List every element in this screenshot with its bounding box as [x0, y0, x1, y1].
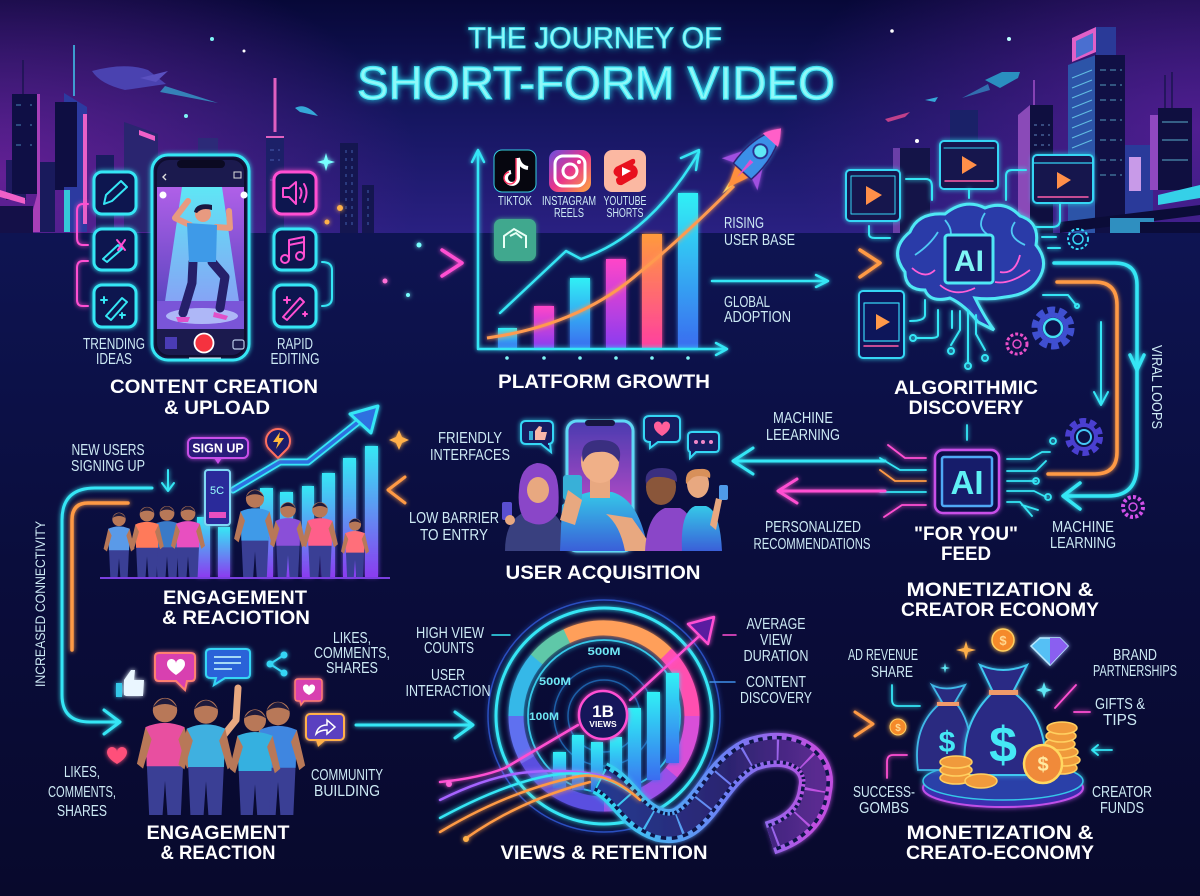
- label: average view duration: [744, 616, 808, 665]
- label: average view duration: DURATION: [744, 648, 808, 665]
- label: personalized recommendations: RECOMMENDATIONS: [754, 536, 870, 553]
- label: friendly interfaces: INTERFACES: [430, 447, 510, 464]
- reaction icons: [521, 416, 719, 458]
- heading: monetization and creator economy: MONETIZATION &: [906, 580, 1094, 601]
- heading: monetization and creator economy: [901, 580, 1099, 621]
- label: community building: BUILDING: [314, 783, 380, 800]
- label: gifts and tips: GIFTS &: [1095, 696, 1146, 713]
- section: algorithmic discovery: [846, 141, 1093, 419]
- flying car right: [962, 72, 1020, 98]
- label: ad revenue share: SHARE: [871, 664, 913, 681]
- icon: heart bubble: [155, 653, 195, 690]
- label: rising user base: RISING: [724, 215, 764, 232]
- label: for you feed: [914, 524, 1018, 565]
- label: high view counts: HIGH VIEW: [416, 625, 484, 642]
- flowing lines: [440, 771, 640, 842]
- section: monetization: [848, 629, 1177, 864]
- label: global adoption: GLOBAL: [724, 294, 770, 311]
- label: personalized recommendations: PERSONALIZED: [765, 519, 861, 536]
- icon: pencil: [94, 172, 136, 214]
- label: friendly interfaces: [430, 430, 510, 464]
- label: rapid editing: EDITING: [270, 351, 320, 368]
- label: creator funds: CREATOR: [1092, 784, 1152, 801]
- label: content discovery: DISCOVERY: [740, 690, 812, 707]
- icon: tiktok: [494, 150, 536, 192]
- label: new users signing up: [71, 442, 145, 475]
- label: creator funds: [1092, 784, 1152, 817]
- bracket: right: [322, 262, 332, 306]
- bag big: [965, 665, 1046, 775]
- heading: content creation: [110, 377, 318, 419]
- label: high view counts: COUNTS: [424, 640, 474, 657]
- viral loop arrow teal: [1054, 263, 1144, 509]
- label: rapid editing: [270, 336, 320, 368]
- platform labels: TIKTOK: [498, 194, 532, 208]
- heading: engagement and reaction: [146, 823, 290, 864]
- person: man with phone: [560, 440, 655, 551]
- bag big: $: [989, 717, 1017, 773]
- phone sign up: [205, 470, 230, 525]
- label: rising user base: [724, 215, 795, 249]
- chart axes: [472, 150, 727, 355]
- label: content discovery: [740, 674, 812, 707]
- person: blond man: [682, 469, 728, 551]
- heading: algorithmic discovery: DISCOVERY: [908, 398, 1024, 419]
- section: engagement and reaction: [48, 630, 473, 864]
- heading: engagement and reaction: ENGAGEMENT: [146, 823, 290, 844]
- label: user interaction: USER: [431, 667, 465, 684]
- label: community building: [311, 767, 383, 800]
- section: new users: [71, 406, 390, 629]
- icon: lightning: [266, 429, 290, 458]
- label: likes comments shares top: COMMENTS,: [314, 645, 390, 662]
- growth arrow: [440, 617, 714, 782]
- icon: forward bubble: [306, 714, 344, 747]
- gauge labels: [529, 646, 620, 723]
- circuit lines: [869, 170, 1079, 369]
- arrow: global adoption: [712, 275, 828, 287]
- arrow: views to monetization: [733, 712, 873, 736]
- flying car small left: [295, 106, 318, 116]
- sparkles: [940, 641, 1052, 698]
- title line 2: SHORT-FORM VIDEO: [357, 57, 835, 109]
- icon: music: [274, 229, 316, 270]
- title line 1: THE JOURNEY OF: [468, 22, 722, 55]
- label: community building: COMMUNITY: [311, 767, 383, 784]
- icon: rocket: [704, 112, 799, 210]
- coin top: [992, 629, 1014, 651]
- flying car left: [92, 66, 218, 103]
- label: likes comments shares left: SHARES: [57, 803, 107, 820]
- rocket trail: [487, 186, 734, 338]
- viral loop arrow orange: [1048, 282, 1117, 474]
- icon: AI chip: [935, 450, 999, 513]
- coin top: $: [999, 633, 1007, 648]
- section: user acquisition: [388, 416, 728, 584]
- heading: engagement and reaciotion: & REACIOTION: [162, 608, 310, 629]
- growth chart bars: [498, 193, 698, 348]
- bag left: $: [939, 726, 956, 759]
- label: likes comments shares left: [48, 764, 116, 820]
- icon: small heart bubble: [295, 679, 322, 705]
- heading: content creation: CONTENT CREATION: [110, 377, 318, 398]
- label: new users signing up: SIGNING UP: [71, 458, 145, 475]
- platform labels: [498, 194, 646, 220]
- label: trending ideas: TRENDING: [83, 336, 145, 353]
- label: new users signing up: NEW USERS: [72, 442, 144, 459]
- heading: monetization creato-economy: [906, 823, 1094, 864]
- rising arrow: [233, 406, 378, 490]
- icon: chat bubble: [206, 649, 250, 685]
- person: hijab woman: [502, 463, 566, 551]
- gauge labels: 100M: [529, 711, 559, 723]
- decorative dots: [317, 153, 422, 297]
- icon: share: [266, 652, 288, 676]
- label: global adoption: ADOPTION: [724, 309, 791, 326]
- heading: platform growth: PLATFORM GROWTH: [498, 372, 710, 393]
- video window top: [940, 141, 998, 189]
- label: likes comments shares left: COMMENTS,: [48, 784, 116, 801]
- coin left: $: [895, 723, 901, 734]
- hub: VIEWS: [589, 719, 617, 729]
- label: low barrier: TO ENTRY: [420, 527, 488, 544]
- heading: user acquisition: USER ACQUISITION: [506, 563, 700, 584]
- bracket: left: [77, 204, 88, 306]
- gauge labels: 500M: [539, 676, 571, 688]
- label: machine leearning: LEEARNING: [766, 427, 840, 444]
- label: trending ideas: IDEAS: [96, 351, 132, 368]
- icon: gear small top: [1068, 229, 1088, 249]
- people group: [137, 688, 305, 815]
- label: average view duration: VIEW: [760, 632, 792, 649]
- label: user interaction: INTERACTION: [406, 683, 490, 700]
- film strip: [600, 750, 816, 838]
- short callout arrows: [887, 685, 1112, 778]
- heading: monetization creato-economy: MONETIZATION &: [906, 823, 1094, 844]
- arrow: machine learning to acquisition: [733, 448, 885, 474]
- section: content creation: [77, 155, 332, 419]
- icon: heart: [107, 747, 127, 764]
- heading: engagement and reaction: & REACTION: [160, 843, 276, 864]
- gauge bars: [553, 673, 679, 792]
- section: platform growth: [472, 112, 799, 393]
- label: trending ideas: [83, 336, 145, 368]
- coin stacks: [940, 722, 1080, 788]
- icon: AI chip: AI: [950, 464, 984, 501]
- icon: speaker: [274, 172, 316, 214]
- heading: monetization creato-economy: CREATO-ECONOMY: [906, 843, 1094, 864]
- label: ad revenue share: AD REVENUE: [848, 647, 918, 664]
- platform labels: YOUTUBE: [604, 194, 646, 208]
- icon: magic tool: [94, 229, 136, 270]
- label: machine leearning: MACHINE: [773, 410, 833, 427]
- label: ad revenue share: [848, 647, 918, 681]
- label: friendly interfaces: FRIENDLY: [438, 430, 502, 447]
- label: gifts and tips: TIPS: [1103, 712, 1137, 729]
- label: machine learning right: MACHINE: [1052, 519, 1114, 536]
- arrow: creation to platform growth: [333, 250, 462, 276]
- rising bars: [197, 446, 378, 577]
- icon: AI brain: [898, 204, 1044, 330]
- platform: [923, 762, 1083, 807]
- sign up badge: SIGN UP: [192, 442, 244, 456]
- city skyline: left: [0, 37, 374, 233]
- label: low barrier: LOW BARRIER: [409, 510, 499, 527]
- icon: editing wand: [274, 285, 316, 327]
- section: views and retention: [406, 600, 873, 864]
- person: smiling man: [645, 468, 697, 551]
- coin left: [890, 719, 906, 735]
- phone sign up: 5C: [210, 485, 224, 497]
- video window right: [1033, 155, 1093, 203]
- trend arrow teal: [500, 150, 699, 313]
- platform labels: REELS: [554, 206, 584, 220]
- icon: wand: [94, 285, 136, 327]
- platform labels: INSTAGRAM: [542, 194, 596, 208]
- label: success gombs: GOMBS: [859, 800, 909, 817]
- label: machine learning right: LEARNING: [1050, 535, 1116, 552]
- label: for you feed: FEED: [941, 544, 991, 565]
- label: rapid editing: RAPID: [277, 336, 313, 353]
- label: for you feed: "FOR YOU": [914, 524, 1018, 545]
- icon: AI brain: AI: [954, 245, 984, 278]
- hub: [579, 691, 627, 739]
- arrow: acquisition to signups: [388, 477, 507, 503]
- thin arrow down: [1094, 322, 1108, 405]
- title: [357, 22, 835, 109]
- label: creator funds: FUNDS: [1100, 800, 1144, 817]
- label: increased connectivity: INCREASED CONNECTIVITY: [32, 520, 48, 687]
- label: user interaction: [406, 667, 490, 700]
- background: night sky: [0, 0, 1200, 234]
- video window left: [846, 170, 900, 221]
- heading: views and retention: VIEWS & RETENTION: [500, 843, 708, 864]
- label: likes comments shares top: SHARES: [326, 660, 378, 677]
- axis ticks: [505, 356, 690, 360]
- loop arrow teal: [62, 488, 152, 734]
- city skyline: right: [890, 27, 1200, 233]
- label: brand partnerships: [1093, 647, 1177, 680]
- label: likes comments shares top: [314, 630, 390, 677]
- label: high view counts: [416, 625, 484, 657]
- label: machine leearning: [766, 410, 840, 444]
- arrow: recommendations to acquisition: [778, 479, 885, 503]
- loop arrow orange: [72, 503, 128, 650]
- label: rising user base: USER BASE: [724, 232, 795, 249]
- heading: algorithmic discovery: ALGORITHMIC: [894, 378, 1038, 399]
- label: personalized recommendations: [754, 519, 870, 553]
- phone with selfie: [567, 420, 633, 551]
- label: success gombs: SUCCESS-: [853, 784, 915, 801]
- icon: instagram: [549, 150, 591, 192]
- label: likes comments shares left: LIKES,: [64, 764, 100, 781]
- background: dark ground: [0, 233, 1200, 896]
- heading: content creation: & UPLOAD: [164, 398, 270, 419]
- bag left: [917, 685, 971, 770]
- heading: monetization and creator economy: CREATOR ECONOMY: [901, 600, 1099, 621]
- hub: 1B: [592, 702, 614, 721]
- label: likes comments shares top: LIKES,: [333, 630, 371, 647]
- gauge labels: 500M: [588, 646, 620, 658]
- flying car far right: [885, 97, 938, 122]
- heading: engagement and reaciotion: [162, 588, 310, 629]
- icon: gear violet: [1123, 497, 1143, 517]
- arrow: down small: [162, 470, 174, 491]
- label: average view duration: AVERAGE: [746, 616, 806, 633]
- video window lower: [859, 291, 904, 358]
- label: viral loops: VIRAL LOOPS: [1148, 345, 1164, 429]
- callout ticks: [492, 635, 736, 682]
- icon: gear pink: [1007, 334, 1027, 354]
- icon: diamond: [1031, 638, 1068, 665]
- icon: gear teal: [1069, 422, 1099, 452]
- arrow: rising user base: [712, 250, 880, 277]
- gauge rings: [488, 600, 720, 832]
- icon: gear large: [1036, 311, 1070, 345]
- section: for you feed: [733, 410, 1116, 621]
- label: low barrier: [409, 510, 499, 544]
- platform labels: SHORTS: [606, 206, 644, 220]
- baseline: [100, 577, 390, 579]
- label: content discovery: CONTENT: [746, 674, 806, 691]
- icon: youtube shorts: [604, 150, 646, 192]
- label: machine learning right: [1050, 519, 1116, 552]
- icon: thumbs up: [116, 670, 144, 697]
- heading: algorithmic discovery: [894, 378, 1038, 419]
- icon: green app: [494, 219, 536, 261]
- coin stacks: $: [1037, 754, 1049, 776]
- sign up badge: [188, 438, 248, 464]
- sparkle: [389, 430, 409, 450]
- label: brand partnerships: BRAND: [1113, 647, 1157, 664]
- label: global adoption: [724, 294, 791, 326]
- label: success gombs: [853, 784, 915, 817]
- arrow: engagement to views: [356, 712, 473, 738]
- heading: engagement and reaciotion: ENGAGEMENT: [163, 588, 307, 609]
- chip circuit lines: [880, 425, 1056, 517]
- phone: [152, 155, 249, 360]
- label: gifts and tips: [1095, 696, 1146, 729]
- crowd: [104, 490, 369, 577]
